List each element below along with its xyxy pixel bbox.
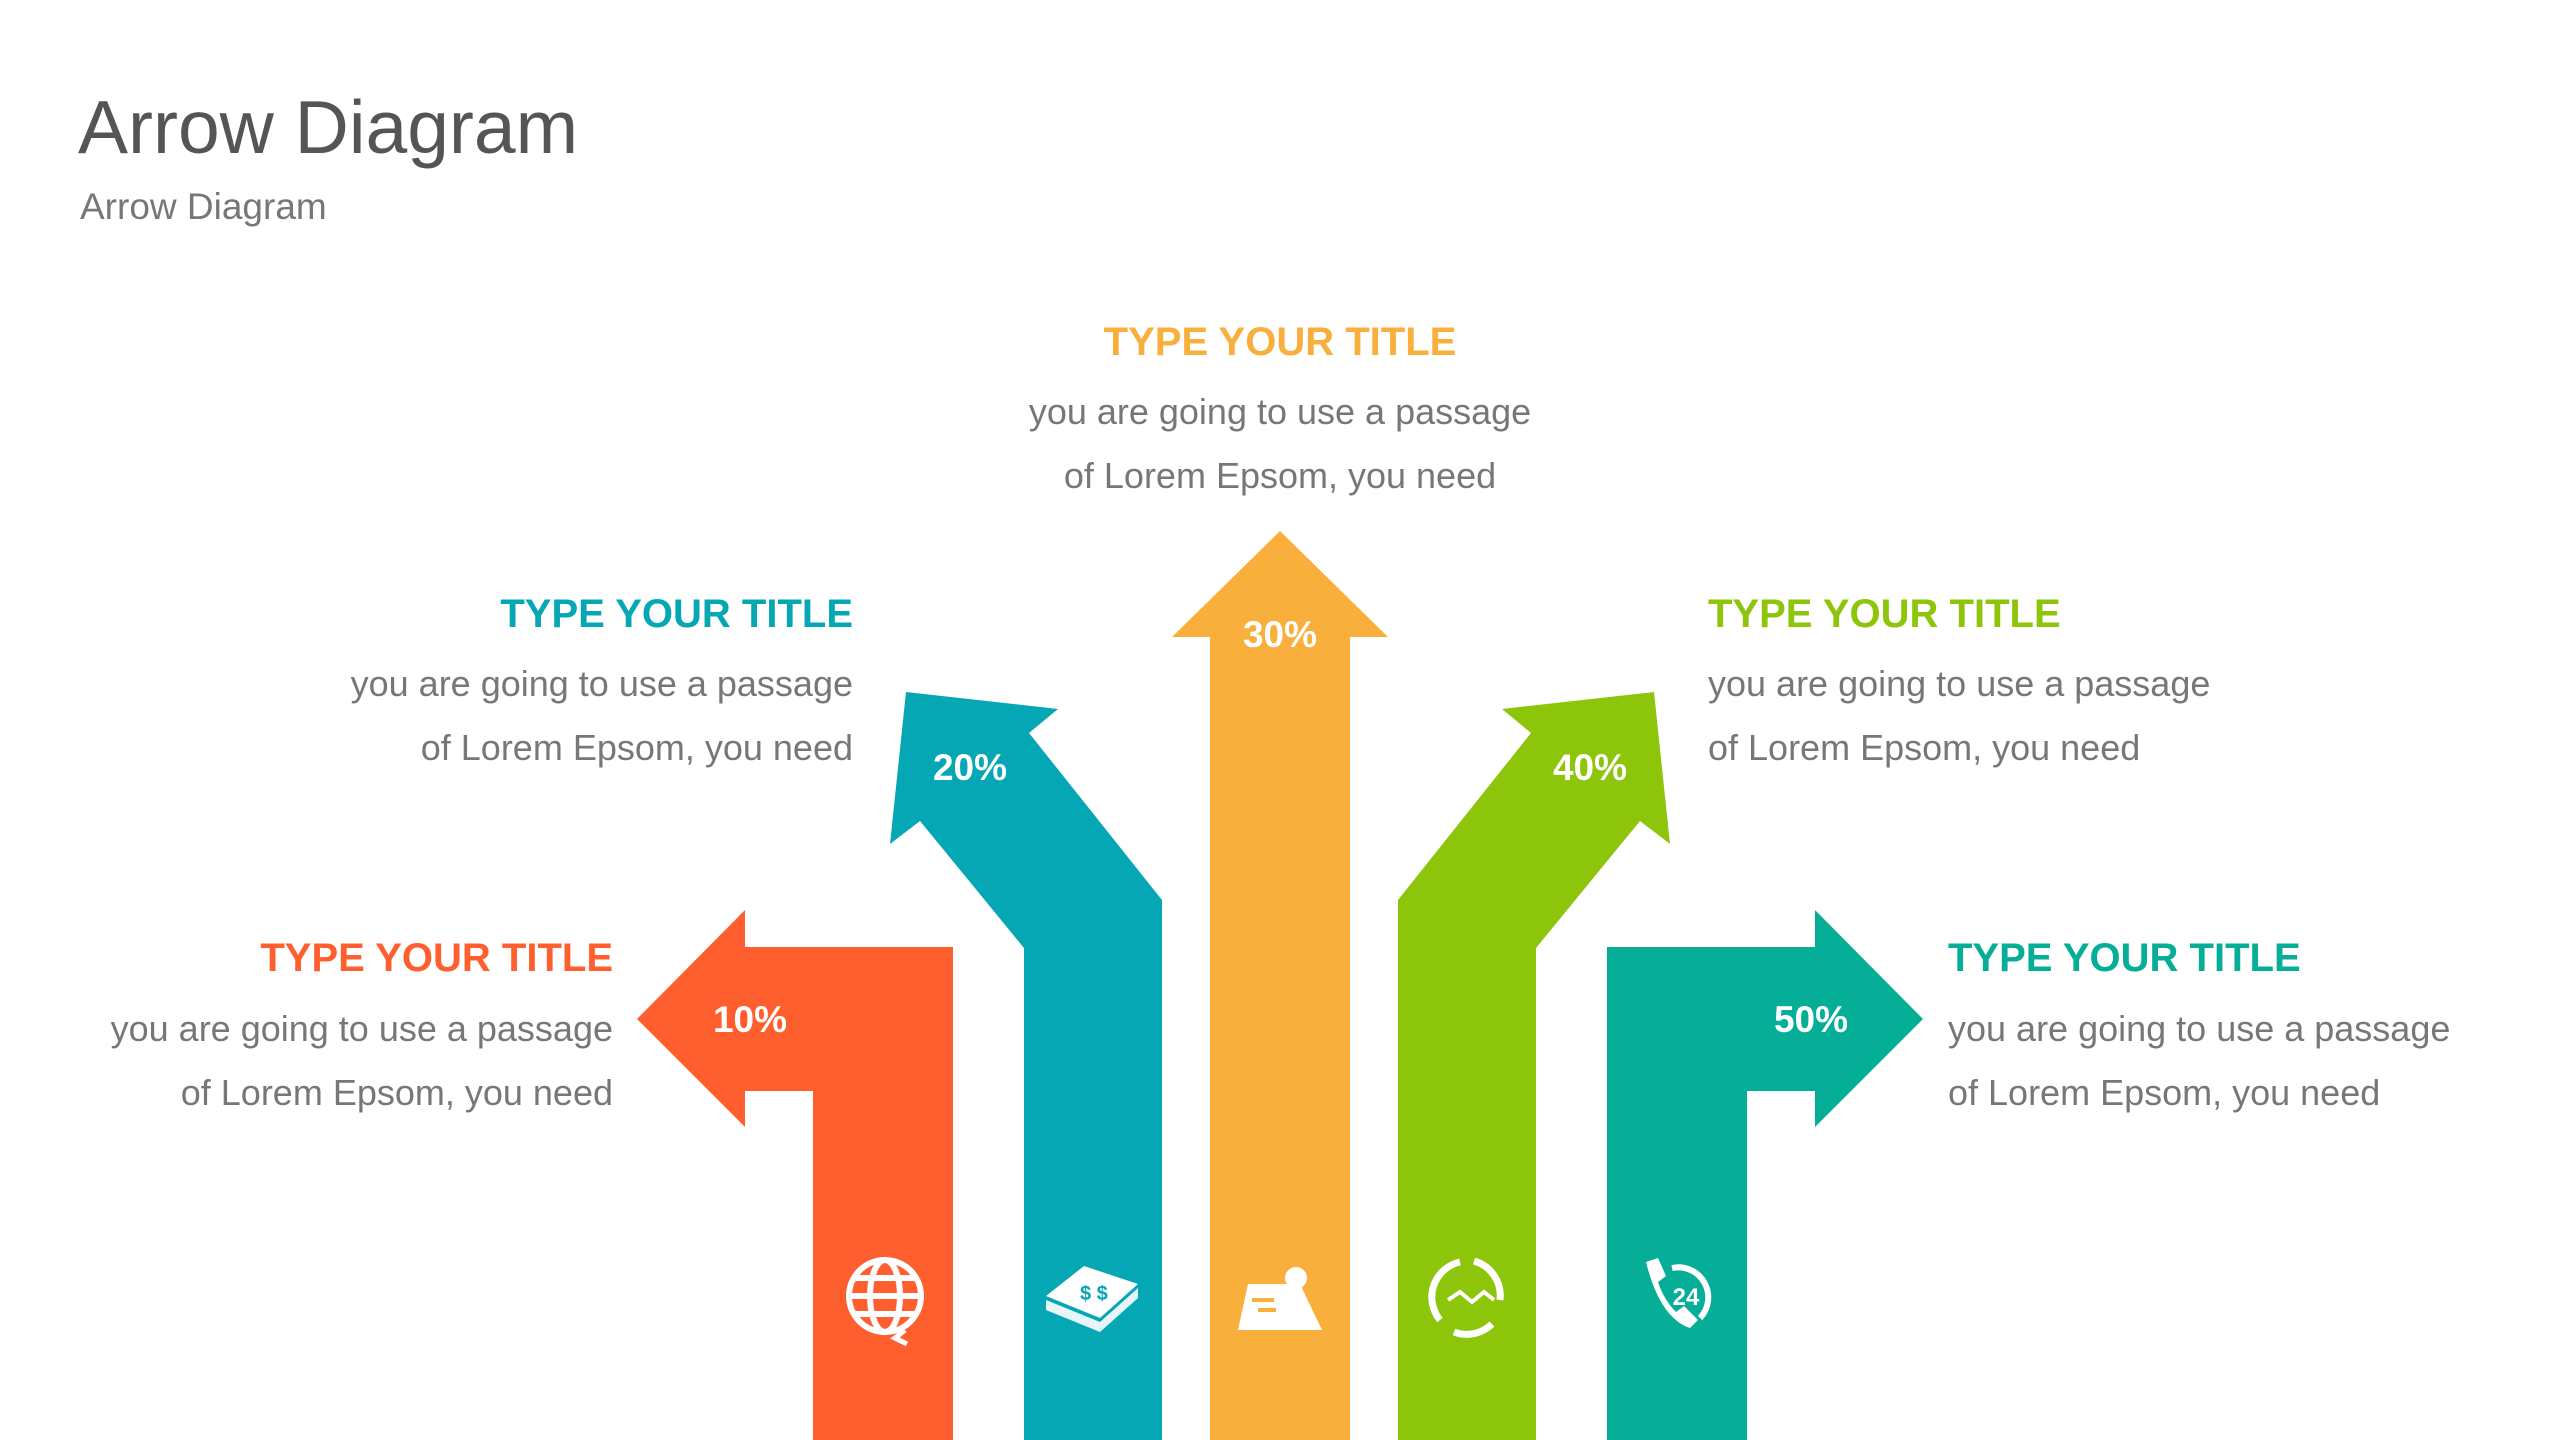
- text block: teal: [1948, 936, 2450, 1113]
- text block: orange: [111, 936, 613, 1113]
- arrow: blue 20%: [890, 692, 1162, 1440]
- text block: teal: you are going to use a passage: [1948, 1008, 2450, 1049]
- arrow: green 40%: [1398, 692, 1670, 1440]
- text block: teal: TYPE YOUR TITLE: [1948, 936, 2301, 980]
- arrow: yellow 30%: [1172, 531, 1388, 1440]
- subtitle: Arrow Diagram: [80, 186, 327, 227]
- text block: blue: you are going to use a passage: [351, 663, 853, 704]
- arrow: yellow 30%: 30%: [1243, 614, 1317, 655]
- arrow: teal 50%: [1607, 910, 1923, 1440]
- icon: 24h phone: 24: [1673, 1284, 1700, 1311]
- text block: center: [1029, 320, 1531, 496]
- text block: blue: [351, 592, 853, 768]
- title: Arrow Diagram: [78, 85, 578, 169]
- icon: money: $ $: [1080, 1283, 1108, 1305]
- text block: green: TYPE YOUR TITLE: [1708, 592, 2061, 636]
- text block: green: of Lorem Epsom, you need: [1708, 727, 2140, 768]
- text block: orange: you are going to use a passage: [111, 1008, 613, 1049]
- text block: teal: of Lorem Epsom, you need: [1948, 1072, 2380, 1113]
- arrow: orange 10%: [637, 910, 953, 1440]
- arrow: teal 50%: 50%: [1774, 999, 1848, 1040]
- text block: orange: TYPE YOUR TITLE: [260, 936, 613, 980]
- icon: money: [1046, 1266, 1138, 1332]
- text block: green: you are going to use a passage: [1708, 663, 2210, 704]
- arrow: blue 20%: 20%: [933, 747, 1007, 788]
- icon: 24h phone: [1646, 1258, 1708, 1328]
- arrow: green 40%: 40%: [1553, 747, 1627, 788]
- icon: globe: [849, 1260, 921, 1344]
- text block: green: [1708, 592, 2210, 768]
- icon: network cycle: [1432, 1261, 1500, 1334]
- icon: map pin: [1238, 1267, 1322, 1330]
- text block: center: TYPE YOUR TITLE: [1104, 320, 1456, 364]
- text block: blue: TYPE YOUR TITLE: [500, 592, 853, 636]
- text block: orange: of Lorem Epsom, you need: [181, 1072, 613, 1113]
- text block: center: of Lorem Epsom, you need: [1064, 455, 1496, 496]
- text block: blue: of Lorem Epsom, you need: [421, 727, 853, 768]
- arrow: orange 10%: 10%: [713, 999, 787, 1040]
- text block: center: you are going to use a passage: [1029, 391, 1531, 432]
